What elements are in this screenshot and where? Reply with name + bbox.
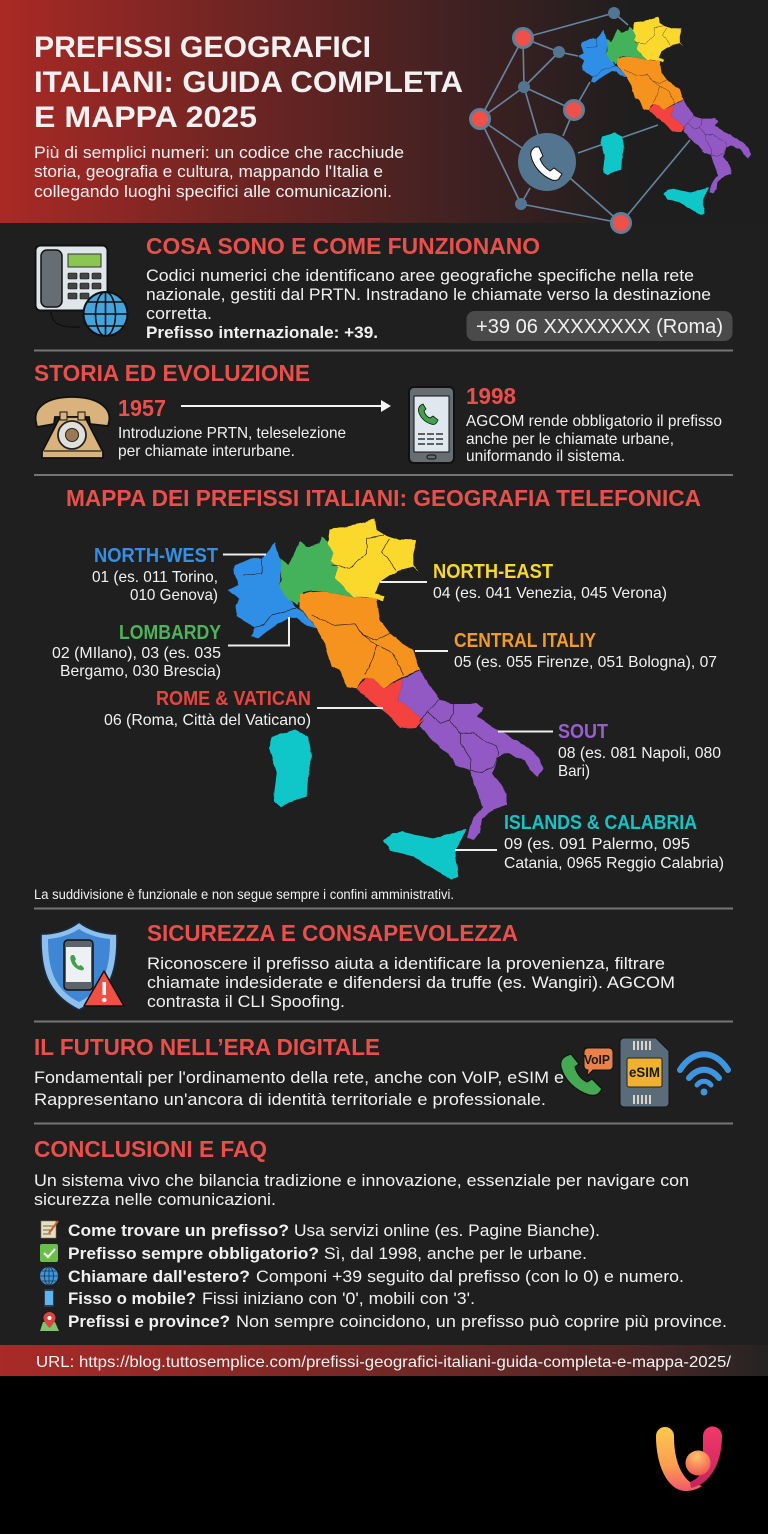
footer URL bar (0, 1345, 768, 1376)
FAQ item: chiamare dall'estero: Componi +39 seguito dal prefisso (con lo 0) e numero. (256, 1267, 684, 1286)
text block: Un sistema vivo che bilancia tradizione e innovazione, essenziale per navigare con (34, 1171, 689, 1190)
text block: contrasta il CLI Spoofing. (147, 992, 345, 1011)
title: E MAPPA 2025 (34, 101, 257, 134)
subtitle: Più di semplici numeri: un codice che racchiude (34, 143, 404, 162)
callout: north-east: NORTH-EAST (433, 561, 553, 583)
heading: STORIA ED EVOLUZIONE (34, 360, 310, 386)
FAQ item: prefissi e province: Prefissi e province? (68, 1312, 230, 1331)
icon: shield with phone and warning (41, 922, 124, 1010)
text block: Fondamentali per l'ordinamento della rete, anche con VoIP, eSIM e (34, 1068, 564, 1087)
icon: VoIP phone and bubble: VoIP (584, 1052, 610, 1067)
timeline item: 1998: AGCOM rende obbligatorio il prefisso (466, 413, 722, 430)
title (34, 31, 463, 134)
callout: islands and calabria: ISLANDS & CALABRIA (504, 812, 697, 834)
text block (147, 954, 675, 1011)
icon: VoIP phone and bubble (561, 1048, 613, 1095)
callout: north-west: 01 (es. 011 Torino, (92, 569, 218, 586)
text block (34, 1068, 564, 1109)
heading: MAPPA DEI PREFISSI ITALIANI: GEOGRAFIA TELEFONICA (66, 485, 701, 511)
text block: Codici numerici che identificano aree geografiche specifiche nella rete (146, 266, 694, 285)
callout: rome and vatican: 06 (Roma, Città del Vaticano) (104, 712, 311, 729)
timeline item: 1957: per chiamate interurbane. (118, 443, 295, 460)
FAQ item: fisso o mobile: Fisso o mobile? (68, 1289, 196, 1308)
FAQ item: trovare un prefisso: Usa servizi online (es. Pagine Bianche). (294, 1221, 600, 1240)
map of Italy (228, 519, 543, 880)
icon: smartphone (409, 387, 454, 463)
title: ITALIANI: GUIDA COMPLETA (34, 66, 463, 99)
callout: south: Bari) (558, 763, 590, 780)
callout: lombardy: Bergamo, 030 Brescia) (60, 663, 221, 680)
timeline item: 1998: anche per le chiamate urbane, (466, 431, 674, 448)
heading: IL FUTURO NELL’ERA DIGITALE (34, 1034, 380, 1060)
callout: north-east: 04 (es. 041 Venezia, 045 Verona) (433, 585, 667, 602)
callout: north-west (92, 545, 266, 604)
icon: phone in circle (518, 133, 576, 191)
timeline item: 1998 (466, 383, 722, 465)
FAQ item: fisso o mobile (44, 1289, 475, 1308)
callout: south: 08 (es. 081 Napoli, 080 (558, 745, 721, 762)
text block: corretta. (146, 304, 212, 323)
text block: chiamate indesiderate e difendersi da truffe (es. Wangiri). AGCOM (147, 973, 675, 992)
logo (656, 1426, 722, 1491)
callout: north-west: 010 Genova) (130, 587, 218, 604)
FAQ item: chiamare dall'estero (40, 1267, 684, 1286)
header panel (0, 0, 768, 232)
timeline item: 1998: uniformando il sistema. (466, 448, 625, 465)
callout: number example (466, 311, 732, 341)
callout: islands and calabria (455, 812, 724, 872)
icon: rotary phone (36, 397, 109, 458)
text block: nazionale, gestiti dal PRTN. Instradano le chiamate verso la destinazione (146, 285, 711, 304)
arrow (181, 400, 391, 412)
callout: north-east (380, 561, 667, 602)
black bottom area (0, 1376, 768, 1534)
icon: desk phone with globe (36, 246, 128, 336)
callout: islands and calabria: 09 (es. 091 Palermo, 095 (504, 836, 690, 853)
icon: wifi (680, 1054, 728, 1096)
icon: eSIM: eSIM (629, 1064, 660, 1080)
callout: rome and vatican: ROME & VATICAN (156, 688, 311, 710)
subtitle: storia, geografia e cultura, mappando l'Italia e (34, 162, 383, 181)
footer URL bar: URL: https://blog.tuttosemplice.com/prefissi-geografici-italiani-guida-completa-e-mappa-2025/ (36, 1354, 732, 1371)
timeline item: 1957 (118, 395, 346, 460)
callout: lombardy (52, 617, 289, 680)
text block: sicurezza nelle comunicazioni. (34, 1190, 276, 1209)
section: cosa sono e come funzionano (36, 233, 732, 342)
panel: map of Italian prefixes (34, 485, 724, 902)
text block: Rappresentano un'ancora di identità territoriale e professionale. (34, 1090, 546, 1109)
callout: islands and calabria: Catania, 0965 Reggio Calabria) (504, 855, 724, 872)
callout: rome and vatican (104, 688, 383, 729)
network graph illustration (470, 7, 690, 232)
heading: CONCLUSIONI E FAQ (34, 1136, 267, 1162)
icon: eSIM (620, 1038, 669, 1107)
text block: Riconoscere il prefisso aiuta a identificare la provenienza, filtrare (147, 954, 665, 973)
timeline item: 1957: 1957 (118, 395, 166, 421)
heading: COSA SONO E COME FUNZIONANO (146, 233, 540, 259)
callout: central italy (415, 630, 717, 671)
subtitle (34, 143, 404, 201)
FAQ item: chiamare dall'estero: Chiamare dall'estero? (68, 1267, 250, 1286)
FAQ item: trovare un prefisso (41, 1221, 600, 1240)
FAQ item: prefisso obbligatorio: Sì, dal 1998, anche per le urbane. (324, 1244, 587, 1263)
text block (34, 1171, 689, 1209)
FAQ item: prefisso obbligatorio: Prefisso sempre obbligatorio? (68, 1244, 319, 1263)
timeline item: 1957: Introduzione PRTN, teleselezione (118, 425, 346, 442)
callout: lombardy: 02 (MIlano), 03 (es. 035 (52, 645, 221, 662)
callout: lombardy: LOMBARDY (119, 622, 222, 644)
footnote: La suddivisione è funzionale e non segue sempre i confini amministrativi. (34, 887, 454, 902)
FAQ item: prefissi e province (40, 1312, 727, 1331)
FAQ item: prefissi e province: Non sempre coincidono, un prefisso può coprire più province. (236, 1312, 727, 1331)
callout: south: SOUT (558, 721, 608, 743)
text block: Prefisso internazionale: +39. (146, 323, 378, 342)
section: conclusioni e FAQ (34, 1136, 727, 1331)
header map of Italy (578, 17, 751, 215)
section: sicurezza e consapevolezza (41, 920, 675, 1011)
callout: number example: +39 06 XXXXXXXX (Roma) (476, 316, 723, 338)
section: storia ed evoluzione (34, 360, 722, 465)
heading: SICUREZZA E CONSAPEVOLEZZA (147, 920, 518, 946)
section: il futuro nell'era digitale (34, 1034, 728, 1109)
callout: central italy: 05 (es. 055 Firenze, 051 Bologna), 07 (454, 654, 717, 671)
callout: north-west: NORTH-WEST (94, 545, 218, 567)
FAQ item: trovare un prefisso: Come trovare un prefisso? (68, 1221, 289, 1240)
FAQ item: fisso o mobile: Fissi iniziano con '0', mobili con '3'. (202, 1289, 475, 1308)
callout: central italy: CENTRAL ITALIY (454, 630, 597, 652)
callout: south (498, 721, 721, 780)
title: PREFISSI GEOGRAFICI (34, 31, 371, 64)
text block (146, 266, 711, 342)
timeline item: 1998: 1998 (466, 383, 516, 409)
subtitle: collegando luoghi specifici alle comunicazioni. (34, 182, 392, 201)
FAQ item: prefisso obbligatorio (40, 1244, 587, 1263)
